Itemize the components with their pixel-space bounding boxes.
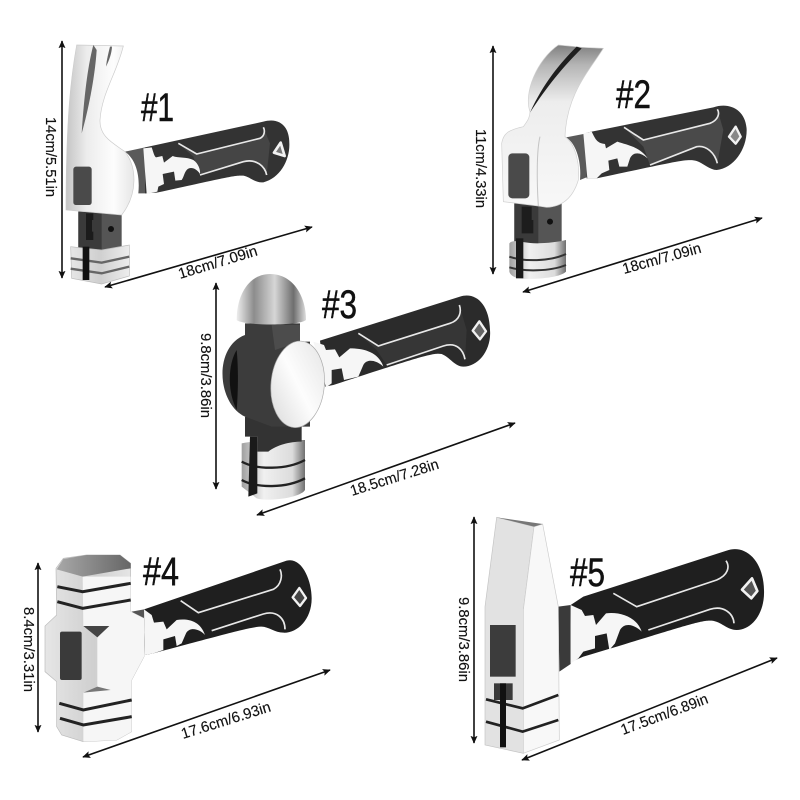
height label #1: 14cm/5.51in [42, 117, 59, 197]
length arrow #4 [83, 670, 330, 757]
length label #3: 18.5cm/7.28in [348, 456, 441, 500]
height label #3: 9.8cm/3.86in [197, 333, 214, 418]
label: #4: #4 [143, 550, 179, 594]
height label #4: 8.4cm/3.31in [20, 607, 37, 692]
height arrow #5 [473, 517, 475, 743]
height label #2: 11cm/4.33in [472, 129, 489, 208]
hammer #5 illustration [485, 517, 764, 753]
hammer #4 group [20, 550, 330, 757]
height arrow #4 [37, 563, 39, 732]
hammer #2 illustration [502, 45, 747, 279]
length label #5: 17.5cm/6.89in [618, 691, 711, 739]
hammer #3 group [197, 274, 515, 515]
height arrow #3 [215, 283, 217, 489]
length label #4: 17.6cm/6.93in [179, 699, 273, 743]
length label #1: 18cm/7.09in [176, 243, 260, 283]
label: #2: #2 [616, 73, 651, 117]
label: #3: #3 [322, 283, 357, 327]
height label #5: 9.8cm/3.86in [455, 597, 472, 682]
height arrow #2 [492, 46, 494, 274]
hammer #5 group [455, 517, 777, 760]
hammer #1 illustration [66, 45, 289, 284]
height arrow #1 [61, 41, 63, 278]
length label #2: 18cm/7.09in [621, 240, 703, 278]
hammer #1 group [42, 41, 312, 287]
length arrow #2 [523, 218, 762, 292]
length arrow #1 [105, 227, 312, 287]
hammer #3 illustration [222, 274, 490, 500]
length arrow #5 [522, 658, 777, 760]
length arrow #3 [257, 423, 515, 515]
hammer #4 illustration [45, 555, 312, 742]
label: #1: #1 [141, 86, 174, 130]
label: #5: #5 [570, 551, 605, 595]
hammer #2 group [472, 45, 762, 292]
